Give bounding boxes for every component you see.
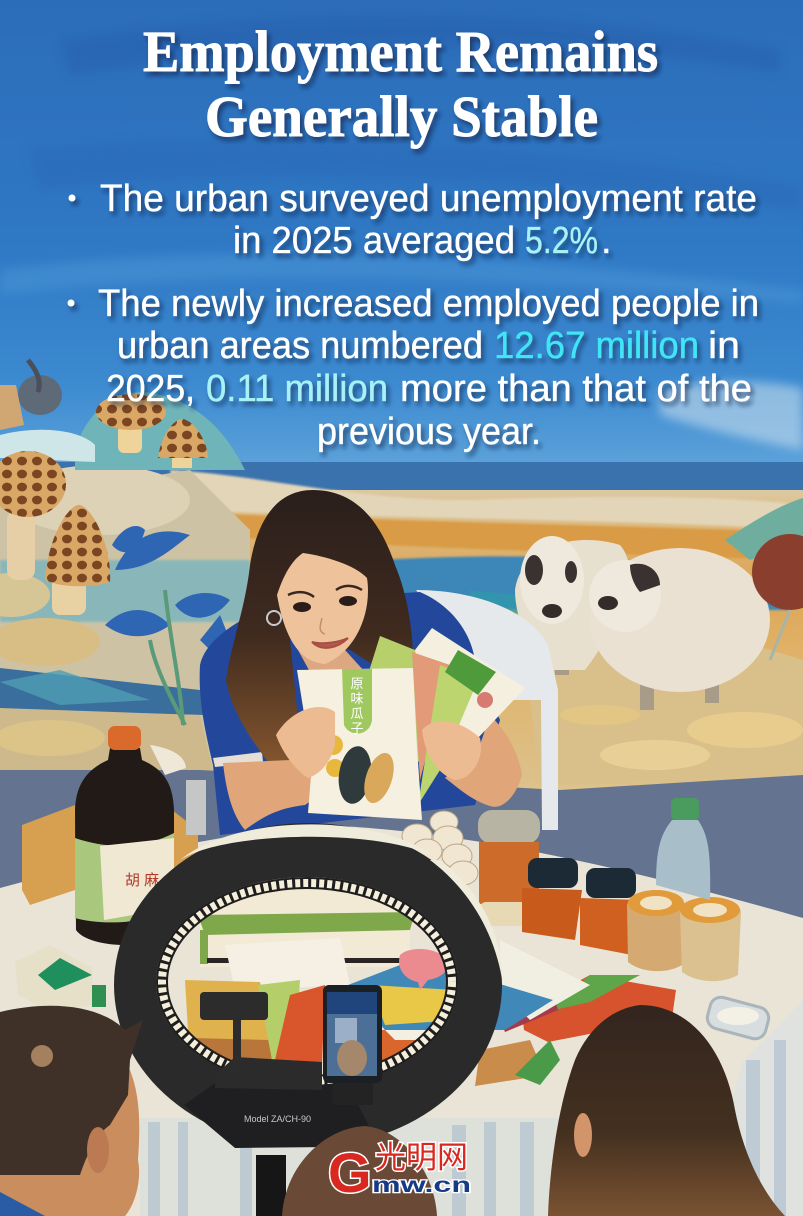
text block: new urban jobs bullet: previous year.: [317, 411, 541, 453]
illustration: sheep pair: [515, 536, 770, 710]
main sunflower seed bag: 原: [350, 676, 364, 691]
text block: unemployment rate bullet: The urban surveyed unemployment rate: [100, 178, 757, 220]
icon: wine glass: [752, 534, 803, 660]
illustration: snack packets: [276, 628, 525, 820]
illustration: woman host: [200, 490, 522, 835]
logo Latin wordmark: mw.cn: [372, 1174, 471, 1197]
title: Generally Stable: [205, 84, 598, 149]
text block: unemployment rate bullet: in 2025 averaged: [233, 220, 515, 262]
ring body: [114, 823, 502, 1147]
text block: new urban jobs bullet: [68, 283, 759, 453]
illustration: colourful snack boxes: [475, 940, 676, 1086]
main sunflower seed bag: 子: [350, 721, 364, 736]
LED strip: [162, 883, 452, 1081]
illustration: eggs: [402, 811, 478, 885]
illustration: man viewer from behind: [0, 1006, 143, 1216]
illustration: dark-lid honey jars: [522, 858, 638, 955]
icon: teapot on left hill: [0, 360, 62, 430]
illustration: orange can: [478, 810, 540, 926]
background: sea horizon: [0, 462, 803, 502]
illustration: ring light with items seen through: Model ZA/CH-90: [244, 1114, 311, 1124]
text block: unemployment rate bullet: [68, 178, 757, 262]
floor: [0, 770, 803, 925]
illustration: water bottle: [656, 798, 710, 900]
illustration: left phone holder: [200, 992, 268, 1078]
icon: blue iris flowers: [105, 526, 230, 725]
logo Chinese wordmark: 光明网: [375, 1140, 468, 1175]
sleeve stripe: [213, 752, 263, 767]
hair: [226, 490, 413, 778]
nose: [320, 618, 325, 634]
logo: gmw.cn: [328, 1140, 471, 1204]
text block: new urban jobs bullet: The newly increased employed people in: [98, 283, 759, 325]
text block: new urban jobs bullet: 2025,: [106, 368, 195, 410]
illustration: clear jars: [627, 890, 741, 981]
background: left bank with ponds and stripes: [0, 465, 250, 780]
neck: [298, 650, 365, 672]
text block: unemployment rate bullet: 5.2%: [525, 220, 598, 262]
background: teal hills and snow: [0, 392, 803, 560]
main sunflower seed bag: 味: [350, 691, 364, 706]
hands: [276, 707, 335, 778]
title: [143, 19, 658, 149]
earring: [267, 611, 281, 625]
face: [277, 553, 368, 664]
text block: new urban jobs bullet: 12.67 million: [494, 325, 699, 367]
illustration: plastic tray: [705, 995, 771, 1041]
illustration: white folding chair: [416, 590, 558, 830]
logo letter G: G: [328, 1141, 372, 1204]
main sunflower seed bag: 瓜: [350, 706, 364, 721]
seen through: green gift box: [198, 885, 415, 990]
smile: [312, 638, 348, 648]
table with cloth: [0, 825, 803, 1216]
left arm: [223, 760, 312, 830]
text block: unemployment rate bullet: .: [601, 220, 612, 262]
illustration: oil bottle: 胡 麻: [125, 872, 159, 889]
title: Employment Remains: [143, 19, 658, 84]
stand: [256, 1155, 286, 1216]
background: desert dunes: [0, 470, 803, 790]
background: painted sky: [0, 0, 803, 480]
main sunflower seed bag: [297, 668, 422, 820]
seen through: blue and yellow sign: [348, 949, 553, 1040]
holder bar: [215, 1057, 322, 1090]
illustration: woman viewer from behind: [548, 1005, 785, 1216]
eyes: [288, 586, 362, 612]
text block: new urban jobs bullet: urban areas numbered: [117, 325, 483, 367]
illustration: centre viewer head: [282, 1126, 437, 1216]
right arm: [445, 715, 522, 807]
icon: morel mushrooms: [0, 394, 208, 615]
text block: new urban jobs bullet: 0.11 million: [206, 368, 388, 410]
text block: new urban jobs bullet: in: [708, 325, 740, 367]
illustration: ring light with items seen through: [114, 823, 553, 1216]
seen through: snack packets: [185, 980, 455, 1085]
blue shirt: [200, 592, 500, 835]
illustration: cardboard boxes: [22, 780, 206, 905]
ring base: [184, 1083, 372, 1148]
illustration: oil bottle: [75, 726, 186, 945]
illustration: small green box: [15, 945, 106, 1012]
illustration: smartphone on ring light: [323, 985, 382, 1105]
text block: new urban jobs bullet: more than that of the: [400, 368, 752, 410]
